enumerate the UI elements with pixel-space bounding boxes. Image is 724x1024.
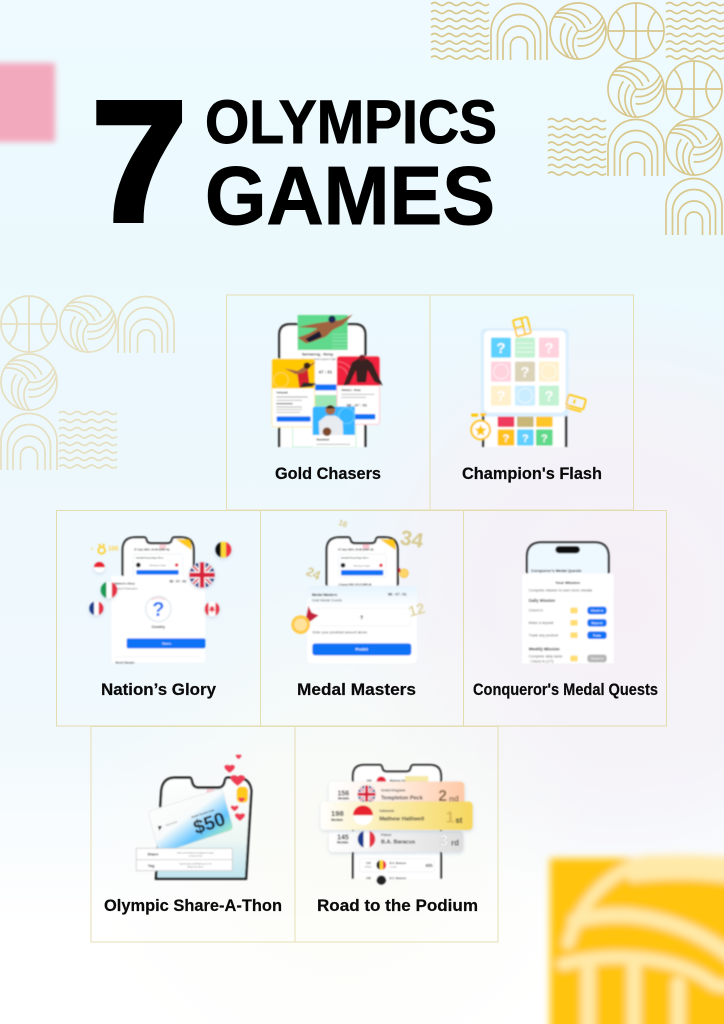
illustration: medal count prediction: 1 August 2024, 20:15 (GMT+8) <box>338 583 372 586</box>
illustration: voucher on phone: Tag 3 friends and PIN 80 users to 50 <box>179 862 212 865</box>
illustration: leaderboard <box>321 765 473 885</box>
row: third place: rd <box>451 839 459 848</box>
title numeral: 7 <box>92 67 186 257</box>
row: first place: 198 <box>331 809 344 818</box>
illustration: memory card grid: ? <box>503 433 510 445</box>
illustration: athlete cards on phone: Swimming - Relay <box>302 352 334 356</box>
row: first place <box>321 802 473 830</box>
panel: Medal Masters <box>260 510 464 726</box>
icon: ticket top <box>513 317 531 337</box>
icon: gold medal <box>291 606 319 634</box>
illustration: voucher on phone: Instant Voucher Code <box>191 808 215 819</box>
row: first place: Mathew Halliwell <box>379 817 425 823</box>
illustration: medal count prediction: 12 <box>407 601 427 621</box>
decorative pink blurred block <box>0 63 55 142</box>
illustration: memory card grid: ? <box>497 341 506 357</box>
illustration: guess the country: 08 : 47 : 01 <box>169 579 186 583</box>
card title: Gold Chasers <box>275 465 381 483</box>
illustration: leaderboard: 118 <box>366 861 371 865</box>
illustration: medal count prediction: 16 <box>337 518 349 530</box>
illustration: leaderboard: Mathew Halliwell <box>390 778 414 782</box>
illustration: medal count prediction: Enter your predicted amount above <box>313 630 367 634</box>
row: second place: 156 <box>338 790 349 797</box>
illustration: guess the country: ? <box>152 599 164 621</box>
illustration: mission list: Check in <box>529 609 543 613</box>
illustration: medal count prediction: Predict <box>355 648 369 652</box>
row: third place: 145 <box>337 834 349 841</box>
illustration: voucher on phone: RM get the official <box>187 866 204 869</box>
illustration: memory card grid <box>471 317 586 447</box>
illustration: voucher on phone: a chance to win <box>188 854 202 857</box>
illustration: voucher on phone <box>136 755 251 879</box>
illustration: leaderboard: Canada <box>390 867 398 869</box>
illustration: leaderboard: B.A. Baracus <box>390 876 407 880</box>
illustration: mission list: Check in <box>591 657 603 661</box>
illustration: memory card grid: ? <box>522 433 529 445</box>
illustration: guess the country: + <box>91 547 94 552</box>
illustration: medal count prediction: Handball Group Stage: Men's <box>341 557 369 560</box>
illustration: mission list: Trade <box>593 633 601 637</box>
illustration: medal count prediction: Germany vs Japan <box>353 564 370 567</box>
title line two: GAMES <box>205 149 495 242</box>
illustration: guess the country <box>89 537 231 664</box>
illustration: memory card grid: ? <box>497 389 506 405</box>
decorative yellow blurred sports pattern <box>550 858 724 1024</box>
row: first place: 1 <box>446 810 455 827</box>
row: first place: st <box>455 816 463 825</box>
illustration: voucher on phone: Share on Facebook or Instagram to spark <box>177 851 214 854</box>
illustration: medal count prediction: Medal Masters <box>312 593 337 597</box>
illustration: medal count prediction: 34 <box>398 526 426 553</box>
row: second place: nd <box>449 794 459 803</box>
illustration: athlete cards on phone: 47 : 01 <box>319 369 333 374</box>
decorative sports pattern: left <box>1 296 174 470</box>
illustration: memory card grid: ? <box>541 433 548 445</box>
row: third place: France <box>381 833 392 837</box>
card title: Champion's Flash <box>462 465 602 483</box>
illustration: medal count prediction: 24 <box>304 564 323 583</box>
illustration: memory card grid: ? <box>545 389 554 405</box>
row: first place: Indonesia <box>379 809 394 813</box>
panel: Nation's Glory <box>56 510 260 726</box>
illustration: voucher on phone: Gold Voucher <box>165 820 178 827</box>
illustration: mission list: Daily Mission <box>529 598 556 603</box>
row: third place: B.A. Baracus <box>381 840 415 846</box>
illustration: voucher on phone: Tag <box>148 863 155 868</box>
illustration: athlete cards on phone <box>272 314 383 447</box>
illustration: memory card grid: ? <box>521 365 530 381</box>
illustration: guess the country: World Medals <box>115 660 135 664</box>
illustration: athlete cards on phone: Volleyball <box>276 392 288 395</box>
row: second place: Medals <box>338 797 349 801</box>
illustration: guess the country: 27 July 2024, 15:00 (GMT+8) <box>134 547 169 551</box>
illustration: leaderboard: 108 <box>366 876 371 880</box>
illustration: mission list: Complete daily tasks <box>529 654 563 658</box>
panel: Conqueror's Medal Quests <box>464 510 666 726</box>
illustration: guess the country: Germany vs Japan <box>149 564 166 567</box>
card title: Nation’s Glory <box>101 681 217 699</box>
illustration: mission list: : Check in (1/7) <box>529 660 553 664</box>
icon: ticket right <box>565 394 586 412</box>
illustration: mission list: Check in <box>591 609 603 613</box>
illustration: leaderboard: 6th <box>426 863 433 868</box>
illustration: medal count prediction <box>291 518 427 664</box>
row: second place: 2 <box>438 788 447 805</box>
illustration: guess the country: Guess <box>162 641 172 645</box>
illustration: medal count prediction: ? <box>360 615 364 621</box>
icon: stopwatch <box>471 413 490 439</box>
illustration: athlete cards on phone: Basketball <box>317 439 329 442</box>
illustration: mission list: Make a deposit <box>529 621 553 625</box>
title line one: OLYMPICS <box>205 88 497 156</box>
card title: Olympic Share-A-Thon <box>104 897 282 915</box>
illustration: mission list: Weekly Mission <box>529 646 560 651</box>
illustration: leaderboard: Medals <box>365 867 372 869</box>
illustration: mission list: Deposit <box>592 621 602 625</box>
decorative sports pattern: top right <box>431 2 724 235</box>
card title: Medal Masters <box>297 681 416 699</box>
row: third place <box>329 830 463 852</box>
card title: Conqueror's Medal Quests <box>473 681 658 699</box>
panel: Champion's Flash <box>430 295 634 510</box>
row: first place: Medals <box>331 818 343 822</box>
illustration: mission list: Complete mission to earn more medals <box>529 589 592 593</box>
panel: Road to the Podium <box>295 726 498 942</box>
illustration: medal count prediction: 27 July 2024, 15:00 (GMT+8) <box>338 548 373 552</box>
row: third place: Medals <box>337 841 348 845</box>
illustration: medal count prediction: 08 : 47 : 01 <box>388 592 407 596</box>
title <box>92 67 497 257</box>
illustration: guess the country: Grand Champion <box>115 586 138 590</box>
card title: Road to the Podium <box>317 897 478 915</box>
illustration: mission list: Your Mission <box>555 580 581 585</box>
row: second place <box>329 782 464 810</box>
illustration: mission list <box>522 542 614 664</box>
illustration: memory card grid: ? <box>545 341 554 357</box>
row: second place: United Kingdom <box>381 789 406 793</box>
illustration: guess the country: Nation's Glory <box>115 582 135 586</box>
illustration: guess the country: Handball Group Stage: Men's <box>136 557 164 560</box>
panel: Gold Chasers <box>226 295 430 510</box>
illustration: medal count prediction: Gold Medal Counts <box>312 599 342 603</box>
illustration: athlete cards on phone: Make your guess & guess it right <box>302 358 336 361</box>
illustration: mission list: Trade any product <box>529 633 558 637</box>
icon: hearts <box>224 755 245 821</box>
illustration: leaderboard: 198 <box>367 778 372 782</box>
illustration: voucher on phone: $50 <box>191 809 228 839</box>
illustration: mission list: Conqueror's Medal Quests <box>531 568 582 573</box>
row: second place: Templeton Peck <box>381 795 424 801</box>
row: third place: 3 <box>440 833 448 850</box>
illustration: voucher on phone: Share <box>147 852 159 857</box>
panel: Olympic Share-A-Thon <box>91 726 295 942</box>
illustration: leaderboard: B.A. Baracus <box>390 861 407 865</box>
illustration: athlete cards on phone: Athletics - Relay <box>341 389 361 392</box>
illustration: athlete cards on phone: 08 : 47 : 01 <box>347 403 368 408</box>
illustration: guess the country: 100 <box>108 547 119 553</box>
illustration: guess the country: Country <box>152 625 165 629</box>
